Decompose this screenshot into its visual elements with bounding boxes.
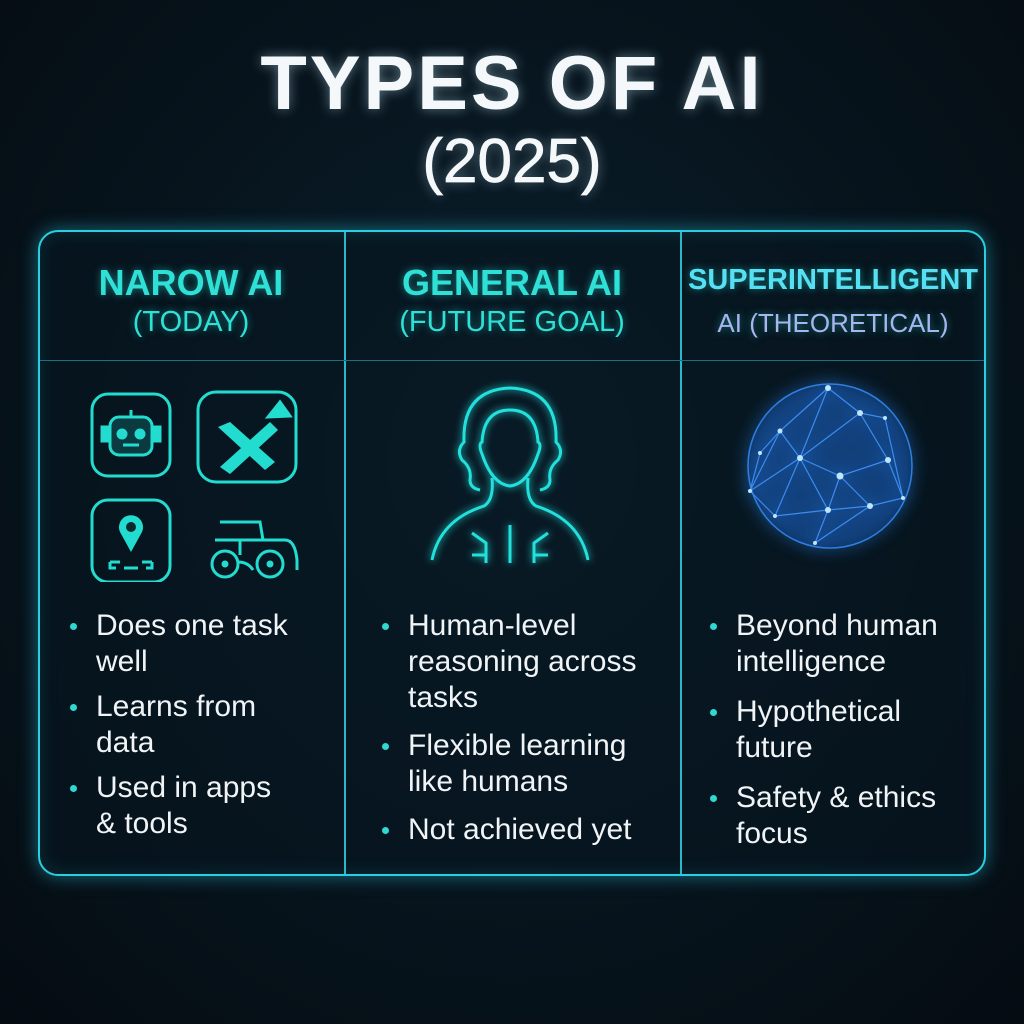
bullets: superintelligent xyxy=(710,609,938,850)
subheading: theoretical: AI (THEORETICAL) xyxy=(717,308,949,338)
bullets: narrow AI: Learns from data xyxy=(96,690,256,759)
bullets: general AI: Flexible learning like humans xyxy=(408,729,626,798)
bullets: general AI: Not achieved yet xyxy=(408,813,631,846)
title: TYPES OF AI xyxy=(260,41,764,126)
subtitle year: (2025) xyxy=(422,127,602,196)
subheading: today: (TODAY) xyxy=(133,306,249,338)
icon: tractor xyxy=(212,522,297,577)
icon: tools xyxy=(198,392,296,482)
main panel xyxy=(38,230,986,876)
heading: narrow AI: NAROW AI xyxy=(99,262,283,303)
bullets: general AI xyxy=(382,609,636,846)
icon: chatbot xyxy=(92,394,170,476)
icon: human silhouette xyxy=(426,380,594,567)
bullets: superintelligent: Beyond human intelligence xyxy=(736,609,938,678)
panel: general AI xyxy=(382,262,636,846)
icons grid xyxy=(90,390,298,582)
panel: narrow AI xyxy=(70,262,298,840)
panel: superintelligent AI xyxy=(686,264,980,850)
bullets: superintelligent: Safety & ethics focus xyxy=(736,781,936,850)
column dividers xyxy=(344,232,346,874)
bullets: superintelligent: Hypothetical future xyxy=(736,695,901,764)
bullets: narrow AI xyxy=(70,609,288,840)
icon: network globe xyxy=(736,372,924,560)
subheading: future goal: (FUTURE GOAL) xyxy=(399,306,625,338)
bullets: narrow AI: Does one task well xyxy=(96,609,288,678)
heading: superintelligent: SUPERINTELLIGENT xyxy=(688,264,978,296)
heading: general AI: GENERAL AI xyxy=(402,262,622,303)
bullets: narrow AI: Used in apps & tools xyxy=(96,771,271,840)
bullets: general AI: Human-level reasoning across tasks xyxy=(408,609,636,714)
icon: location xyxy=(92,500,170,582)
